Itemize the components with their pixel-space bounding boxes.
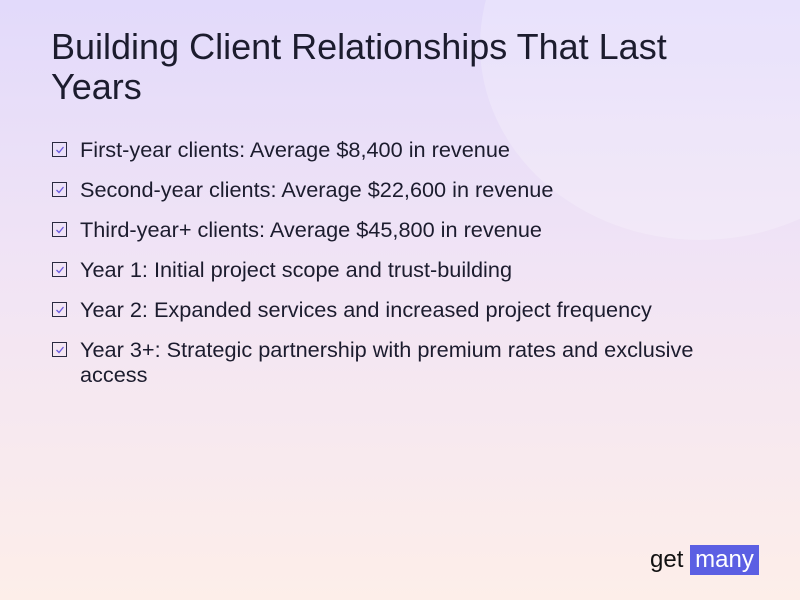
list item 6: Year 3+: Strategic partnership with premium rates and exclusive access <box>80 337 693 387</box>
list item 5: Year 2: Expanded services and increased project frequency <box>80 297 652 322</box>
icon: checkbox <box>52 262 67 277</box>
logo: get <box>650 546 683 573</box>
logo <box>650 545 759 575</box>
icon: checkbox <box>52 302 67 317</box>
title: Building Client Relationships That Last Years <box>51 26 667 107</box>
icon: checkbox <box>52 222 67 237</box>
list item 4: Year 1: Initial project scope and trust-building <box>80 257 512 282</box>
icon: checkbox <box>52 142 67 157</box>
logo: many <box>695 546 754 573</box>
list item 1: First-year clients: Average $8,400 in revenue <box>80 137 510 162</box>
list item 2: Second-year clients: Average $22,600 in revenue <box>80 177 553 202</box>
list item 3: Third-year+ clients: Average $45,800 in revenue <box>80 217 542 242</box>
icon: checkbox <box>52 182 67 197</box>
icon: checkbox <box>52 342 67 357</box>
